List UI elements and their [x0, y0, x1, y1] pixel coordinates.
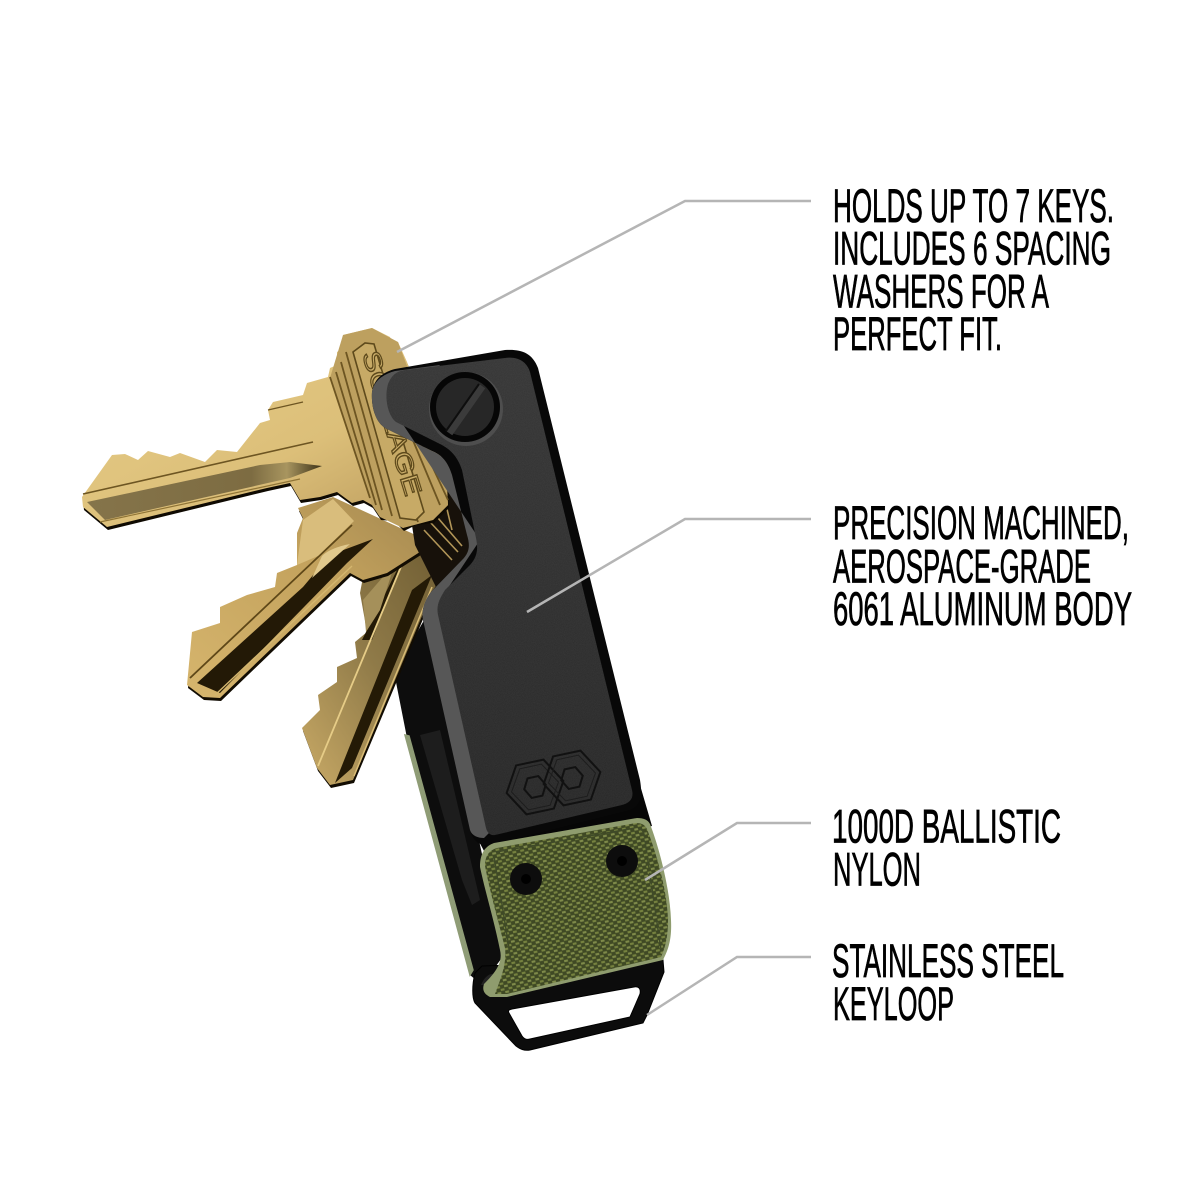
- key stack inside notch: [396, 420, 472, 595]
- rivet right: [606, 845, 638, 877]
- ballistic nylon strap: [480, 818, 671, 997]
- key: middle brass key: [187, 497, 424, 701]
- text: ballistic nylon: NYLON: [833, 842, 921, 896]
- text: holds up to 7 keys: PERFECT FIT.: [833, 307, 1002, 360]
- leader line: nylon: [645, 823, 811, 880]
- stainless steel keyloop: [473, 960, 664, 1050]
- screw: [429, 372, 503, 446]
- text: key brand: SCHLAGE: [356, 348, 427, 499]
- text: stainless steel keyloop: [832, 934, 1064, 1030]
- text: holds up to 7 keys: [833, 179, 1114, 360]
- logo: double hex emboss: [501, 748, 606, 817]
- text: aluminum body: [833, 496, 1132, 635]
- aluminum body: [372, 350, 652, 862]
- leader line: keyloop: [647, 957, 811, 1015]
- leader line: keys: [397, 201, 811, 352]
- key: top brass key with SCHLAGE bow: [82, 328, 449, 531]
- key: lower brass key: [302, 550, 454, 788]
- text: ballistic nylon: [832, 800, 1061, 896]
- device back panel and strap edge: [394, 610, 504, 985]
- leader line: body: [527, 519, 811, 612]
- text: stainless steel keyloop: KEYLOOP: [833, 977, 954, 1030]
- rivet left: [510, 863, 542, 895]
